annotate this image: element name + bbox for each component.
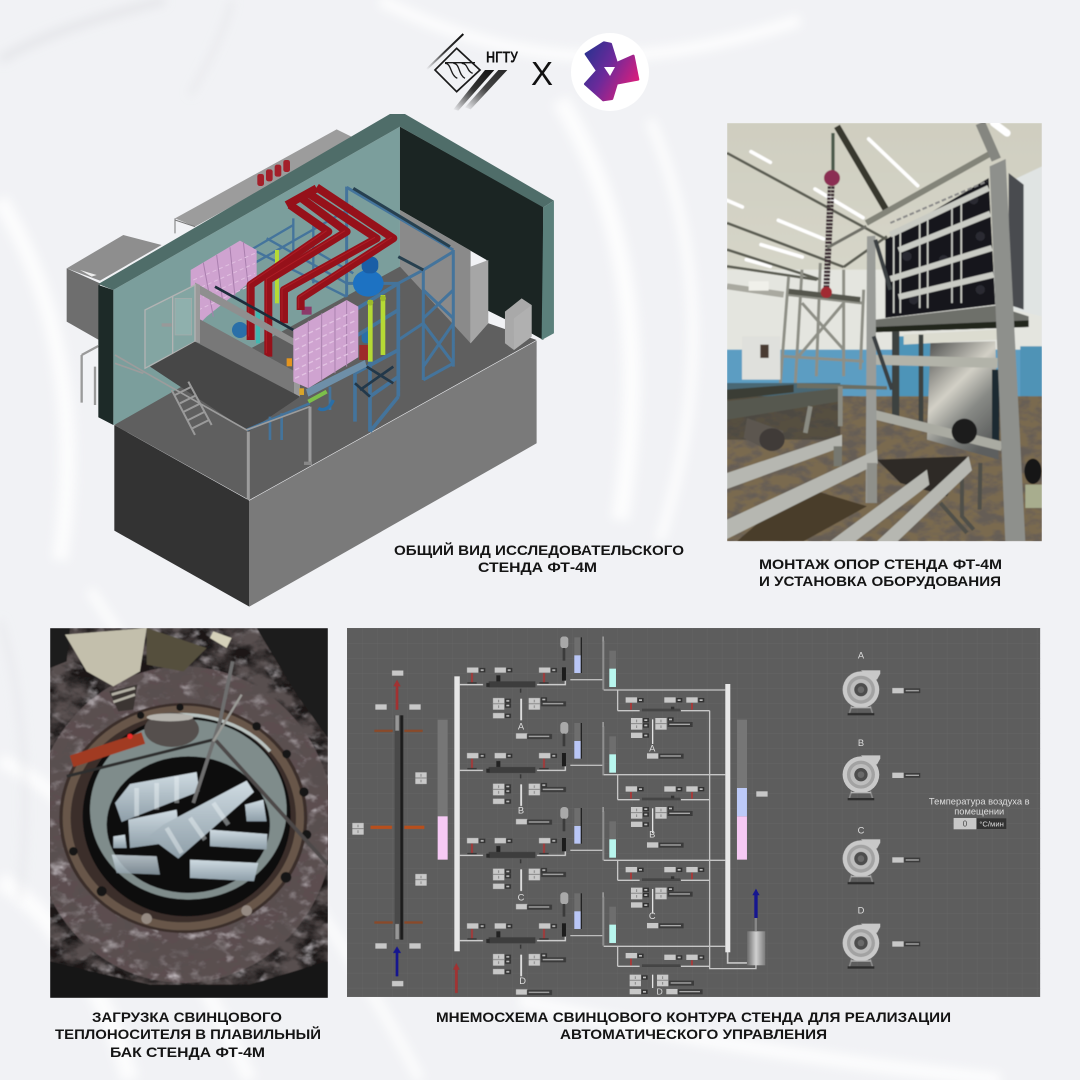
annexes behind the wall xyxy=(67,129,355,405)
left platform xyxy=(727,383,887,433)
ceiling and walls xyxy=(727,123,1042,541)
ingot shadow lines xyxy=(137,776,228,853)
right row letters: B xyxy=(649,829,655,839)
right row letters xyxy=(649,743,656,921)
photo: mounting of supports xyxy=(727,123,1042,541)
teal wall and dark back wall xyxy=(98,114,554,425)
ceiling lights xyxy=(727,123,1007,266)
logos header xyxy=(427,33,649,111)
floor debris and chair xyxy=(737,419,1042,541)
door xyxy=(145,285,195,368)
pink battery modules rear xyxy=(191,241,257,323)
room air temperature readout: °C/мин xyxy=(979,819,1004,828)
blue frame structure, front xyxy=(247,283,398,440)
level bar: right xyxy=(737,720,768,860)
room air temperature readout: 0 xyxy=(963,819,968,828)
torch xyxy=(72,712,199,761)
yellow-green pipes xyxy=(367,295,386,362)
hvac unit xyxy=(749,281,769,291)
pink battery modules front xyxy=(293,300,358,388)
logo: NGTU xyxy=(427,34,518,111)
right row A xyxy=(618,697,710,759)
concrete base xyxy=(114,341,537,607)
left column reactor xyxy=(370,715,424,940)
fan A xyxy=(843,651,920,715)
room air temperature readout: помещении xyxy=(954,807,1004,817)
cabinet at left wall xyxy=(742,336,780,380)
distribution pipes xyxy=(604,690,756,969)
branch letters: C xyxy=(518,893,525,903)
stairs xyxy=(172,382,212,435)
photo: loading lead coolant xyxy=(33,628,333,998)
fan B xyxy=(843,738,920,800)
caption: loading lead: БАК СТЕНДА ФТ-4М xyxy=(110,1044,265,1060)
caption: mimic diagram: МНЕМОСХЕМА СВИНЦОВОГО КОНТУРА СТЕНДА ДЛЯ РЕАЛИЗАЦИИ xyxy=(436,1009,951,1025)
platform under modules xyxy=(299,360,367,410)
row C branch xyxy=(459,807,616,910)
upper platform xyxy=(150,342,300,432)
steel columns and horizontal beams xyxy=(827,123,1025,541)
scaffold xyxy=(780,263,864,383)
branch letters: A xyxy=(518,722,525,732)
metal sheet xyxy=(927,341,999,460)
front gallery frame xyxy=(195,283,300,397)
caption: general view xyxy=(394,541,684,575)
fan C: C xyxy=(858,825,865,835)
row D branch xyxy=(459,892,616,995)
flange xyxy=(59,703,311,933)
railings xyxy=(115,355,312,500)
left column labels xyxy=(352,670,427,986)
caption: loading lead: ТЕПЛОНОСИТЕЛЯ В ПЛАВИЛЬНЫЙ xyxy=(55,1025,321,1042)
caption: mounting xyxy=(759,556,1002,589)
branch letters: D xyxy=(519,976,526,986)
small wall box xyxy=(505,298,532,350)
fan D: D xyxy=(858,905,865,915)
lead ingots xyxy=(112,772,267,881)
inner shell xyxy=(90,715,287,900)
arrows on left column xyxy=(393,680,460,993)
row A branch xyxy=(459,636,616,739)
fan C xyxy=(843,825,920,884)
right row letters: C xyxy=(649,911,656,921)
caption: loading lead: ЗАГРУЗКА СВИНЦОВОГО xyxy=(92,1009,282,1025)
caption: mounting: МОНТАЖ ОПОР СТЕНДА ФТ-4М xyxy=(759,556,1002,572)
red extinguishers xyxy=(257,160,290,186)
rods xyxy=(67,661,328,865)
insulation wrap xyxy=(33,628,333,998)
floor xyxy=(114,267,537,500)
fan B: B xyxy=(858,738,864,748)
right row B xyxy=(618,786,710,848)
ceiling beams xyxy=(727,126,887,295)
level bar: left xyxy=(438,720,448,860)
panel background xyxy=(347,628,1040,997)
caption: general view: ОБЩИЙ ВИД ИССЛЕДОВАТЕЛЬСКОГО xyxy=(394,541,684,558)
caption: mounting: И УСТАНОВКА ОБОРУДОВАНИЯ xyxy=(759,573,1001,589)
header pipe: left xyxy=(454,676,460,951)
foreground beams xyxy=(727,435,972,541)
fan D xyxy=(843,905,920,969)
caption: mimic diagram: АВТОМАТИЧЕСКОГО УПРАВЛЕНИЯ xyxy=(560,1026,827,1042)
room air temperature readout xyxy=(929,797,1030,829)
caption: loading lead xyxy=(55,1009,321,1060)
right row letters: A xyxy=(649,743,656,753)
row B branch xyxy=(459,722,616,825)
branch letters: B xyxy=(518,805,524,815)
room air temperature readout: Температура воздуха в xyxy=(929,797,1030,807)
cylinder tank xyxy=(744,418,785,451)
black battery blocks xyxy=(885,173,1024,318)
caption: mimic diagram xyxy=(436,1009,951,1042)
hoist chain xyxy=(821,133,840,298)
branch letters xyxy=(518,722,526,986)
dark surroundings xyxy=(50,628,328,998)
panel: mimic diagram xyxy=(347,628,1040,997)
right row C xyxy=(618,867,710,928)
logo: NGTU: НГТУ xyxy=(486,50,518,67)
fan A: A xyxy=(858,651,865,661)
separator: X: X xyxy=(531,55,553,92)
caption: general view: СТЕНДА ФТ-4М xyxy=(478,559,597,575)
white rags and hose xyxy=(65,628,232,711)
3D model of the research stand xyxy=(67,114,554,607)
right row D: D xyxy=(657,987,663,997)
equipment: blue vessels and coloured pipes xyxy=(232,250,384,366)
header pipe: right xyxy=(725,684,730,952)
expansion tank and arrow xyxy=(747,889,765,965)
logo: partner emblem xyxy=(571,33,649,111)
steel shelf xyxy=(875,306,1029,428)
red main pipes xyxy=(251,187,393,357)
blue frame structure, back xyxy=(213,187,453,397)
right row D xyxy=(618,953,710,997)
